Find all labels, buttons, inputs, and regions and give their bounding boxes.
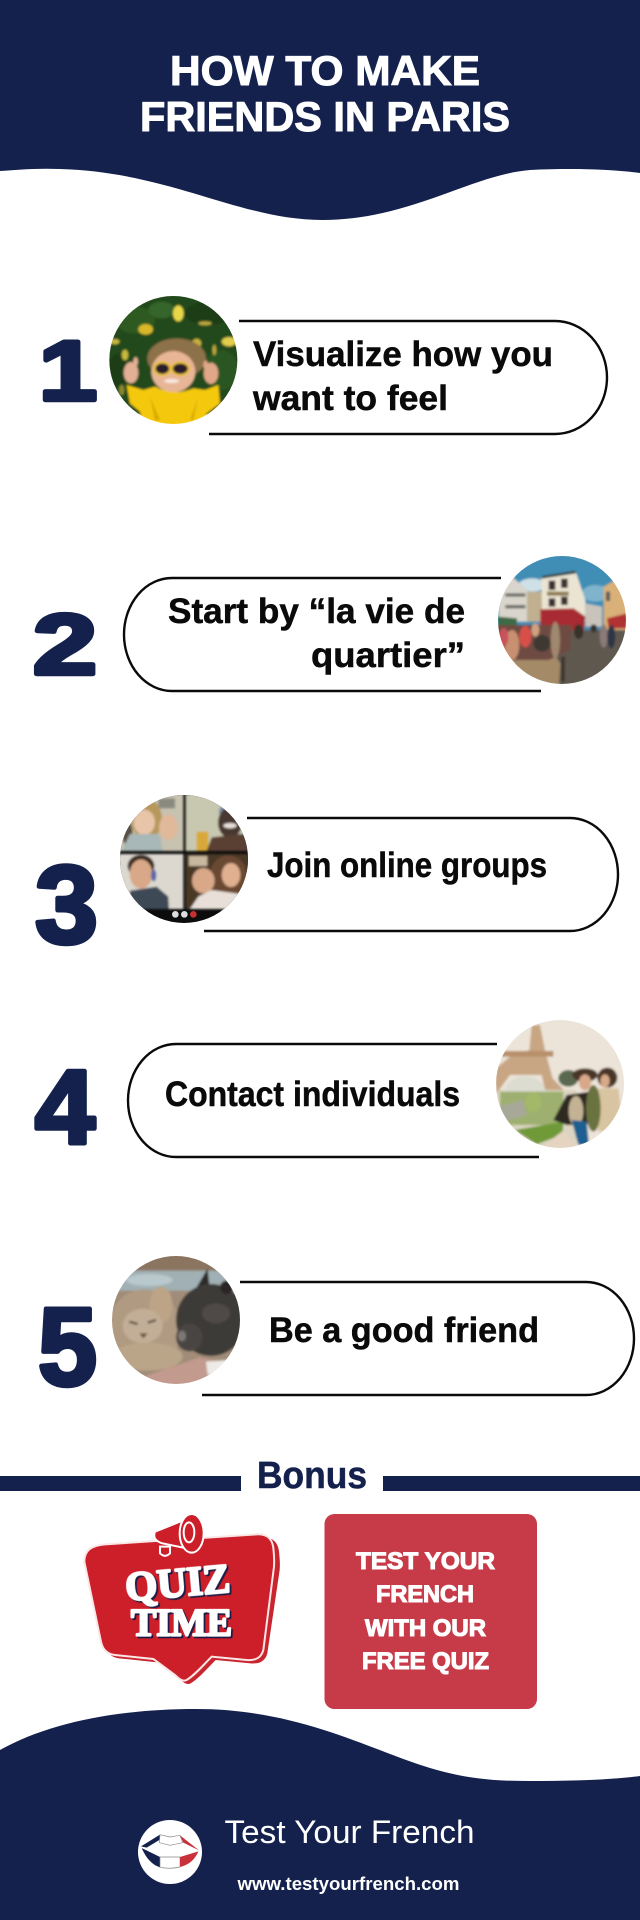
free quiz call to action: FREE QUIZ: [362, 1648, 489, 1675]
website url: www.testyourfrench.com: [236, 1873, 460, 1894]
photo: friends at Eiffel Tower: [496, 1020, 624, 1148]
step 1: [39, 290, 607, 434]
photo: child with sunglasses: [109, 296, 238, 424]
step 2 text: Start by “la vie de: [168, 592, 465, 631]
pill outline 1: [209, 321, 607, 434]
quiz time lettering: QUIZ: [123, 1556, 232, 1611]
pill outline 3: [204, 818, 618, 931]
quiz time lettering: [123, 1556, 232, 1645]
logo: French flag lips: [138, 1820, 202, 1884]
header wave banner: [0, 0, 640, 220]
pill outline 4: [128, 1044, 539, 1157]
brand name: Test Your French: [224, 1814, 474, 1850]
quiz time lettering: TIME: [131, 1601, 232, 1645]
free quiz call to action: FRENCH: [376, 1581, 474, 1608]
bonus heading with rules: [0, 1455, 640, 1497]
step 5 text: Be a good friend: [269, 1311, 539, 1350]
free quiz call to action: TEST YOUR: [356, 1548, 495, 1575]
step 5: [39, 1256, 636, 1396]
footer wave banner: [0, 1709, 640, 1920]
step 1 text: [252, 335, 553, 418]
pill outline 2: [124, 578, 541, 691]
title: FRIENDS IN PARIS: [140, 93, 510, 140]
title: [140, 47, 510, 140]
number 4: 4: [35, 1049, 95, 1166]
number 2: 2: [33, 598, 97, 693]
step 2 text: [168, 592, 465, 675]
step 3 text: Join online groups: [267, 846, 547, 885]
bubble back layer: [88, 1538, 280, 1684]
photo: video call grid: [120, 795, 248, 923]
step 2 text: quartier”: [311, 636, 465, 675]
number 1: 1: [39, 324, 97, 418]
step 3: [35, 795, 620, 946]
megaphone icon: [154, 1514, 204, 1556]
step 4: [35, 1015, 630, 1166]
step 1 text: want to feel: [252, 379, 448, 418]
number 5: 5: [38, 1286, 97, 1409]
quiz time speech bubble: [84, 1514, 280, 1684]
pill outline 5: [202, 1282, 634, 1395]
bubble front: [84, 1534, 274, 1681]
free quiz call to action: [324, 1514, 537, 1709]
photo: cat and dog: [112, 1256, 240, 1384]
number 3: 3: [35, 844, 98, 967]
photo: Montmartre street: [498, 556, 626, 684]
free quiz call to action: WITH OUR: [365, 1615, 486, 1642]
title: HOW TO MAKE: [170, 47, 480, 94]
bonus heading with rules: Bonus: [257, 1455, 367, 1497]
step 4 text: Contact individuals: [165, 1075, 460, 1114]
step 2: [33, 550, 632, 693]
step 1 text: Visualize how you: [253, 335, 553, 374]
